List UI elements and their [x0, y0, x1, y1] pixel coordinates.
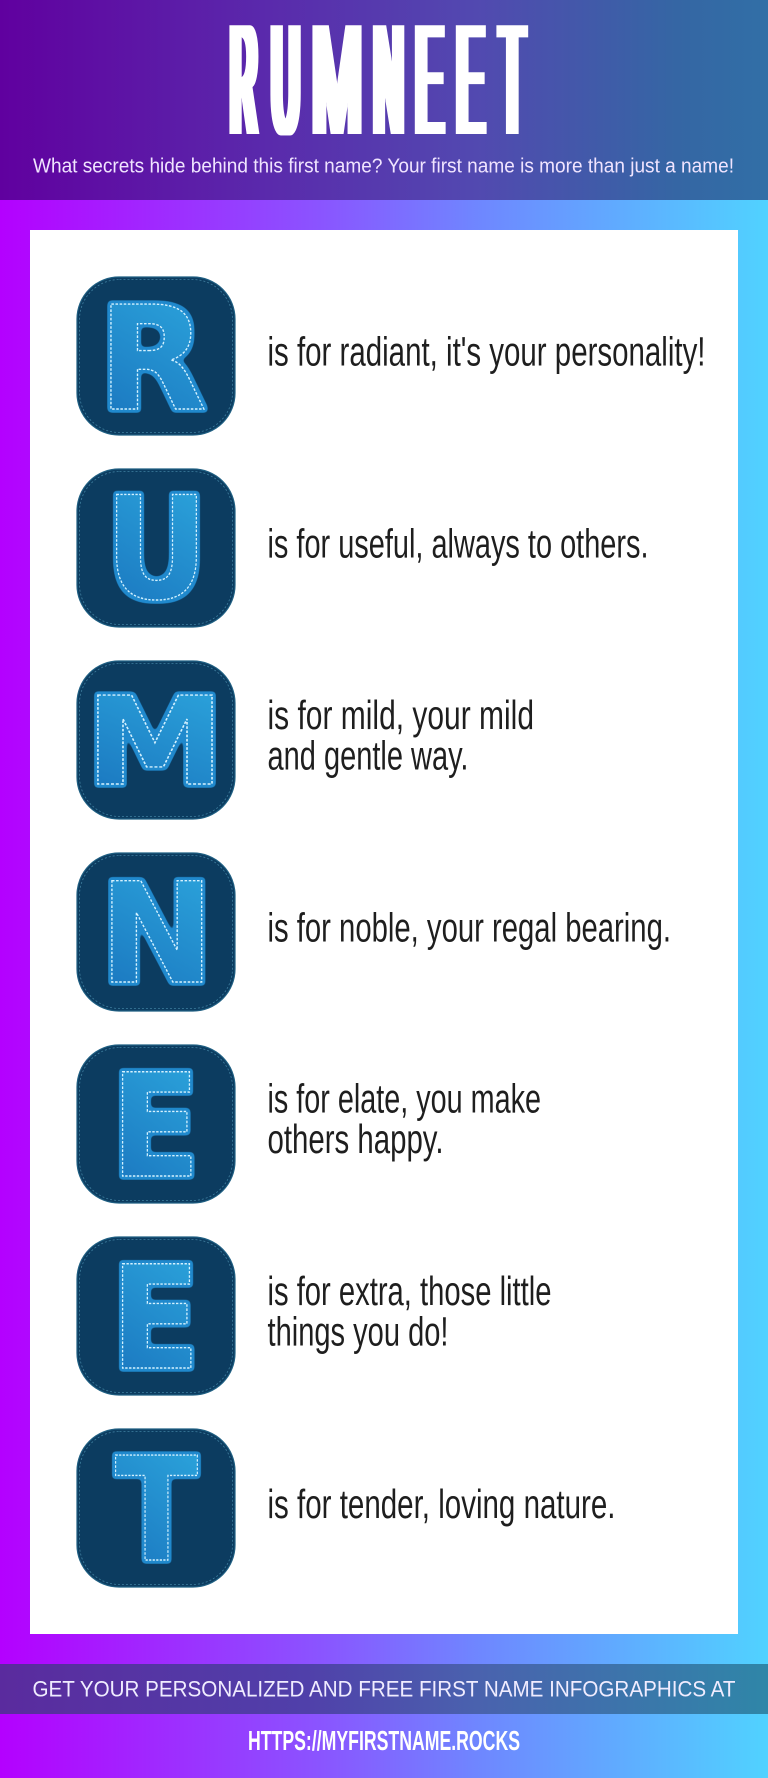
row M [77, 661, 534, 819]
icon: letter T [77, 1426, 235, 1594]
icon: letter E second [77, 1235, 235, 1402]
text: E lines [268, 1076, 541, 1162]
icon: letter E second: E [110, 1235, 200, 1402]
subtitle: What secrets hide behind this first name? Your first name is more than just a name! [33, 156, 734, 178]
icon: letter E [77, 1043, 235, 1210]
text: M lines: and gentle way. [268, 732, 468, 778]
icon: letter E: E [110, 1043, 200, 1210]
row N [77, 853, 671, 1015]
panel: white content [30, 230, 738, 1634]
text: E lines: others happy. [268, 1116, 444, 1162]
text: E second lines [268, 1268, 552, 1354]
row E [77, 1043, 541, 1210]
icon: letter M [77, 661, 235, 819]
row U [77, 467, 648, 632]
text: E lines: is for elate, you make [268, 1076, 541, 1122]
title [229, 0, 528, 168]
icon: letter R: R [98, 275, 207, 443]
icon: letter U: U [105, 467, 208, 632]
text: M lines [268, 692, 534, 778]
text: E second lines: things you do! [268, 1308, 448, 1354]
icon: letter M: M [85, 671, 225, 813]
row E second [77, 1235, 552, 1402]
icon: letter N: N [99, 853, 214, 1015]
row T [77, 1426, 616, 1594]
row R [77, 275, 706, 443]
icon: letter T: T [115, 1426, 198, 1594]
text: E second lines: is for extra, those little [268, 1268, 552, 1314]
text: M lines: is for mild, your mild [268, 692, 534, 738]
footer band [0, 1664, 768, 1714]
footer url: HTTPS://MYFIRSTNAME.ROCKS [248, 1725, 520, 1756]
header band [0, 0, 768, 200]
text: T line: is for tender, loving nature. [268, 1481, 616, 1527]
